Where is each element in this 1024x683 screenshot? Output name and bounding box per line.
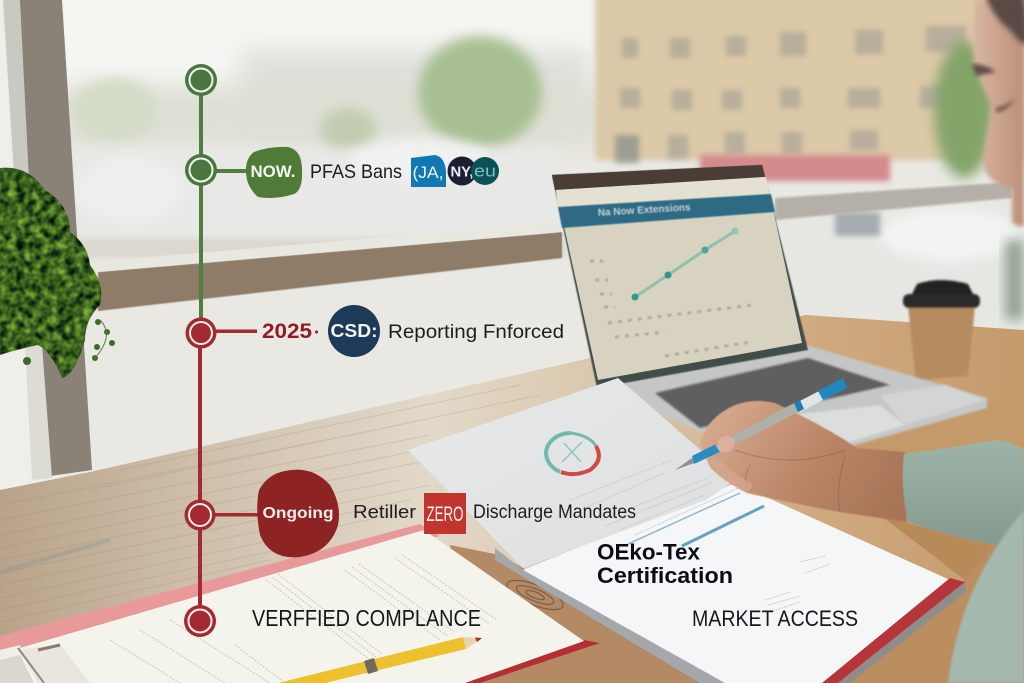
blue accent lines bbox=[628, 493, 740, 544]
railing bbox=[775, 182, 1012, 220]
badge: CSD: CSD: bbox=[330, 321, 378, 341]
lower fingers bbox=[715, 462, 747, 486]
connector: 2025 bbox=[201, 330, 257, 333]
node: start bbox=[185, 64, 217, 96]
badge: NOW: NOW. bbox=[250, 162, 296, 181]
left window frame bbox=[0, 0, 92, 490]
lower street bbox=[775, 205, 1024, 320]
paper stack bbox=[408, 378, 966, 683]
certificate white sheet bbox=[523, 483, 950, 683]
screen bbox=[556, 177, 802, 380]
node: verified compliance bbox=[184, 605, 216, 637]
notebook bottom left bbox=[0, 524, 600, 683]
label: Market Access: MARKET ACCESS bbox=[692, 606, 858, 631]
badge: CSD bbox=[328, 305, 380, 357]
plant bbox=[0, 168, 115, 378]
window sill bbox=[98, 232, 562, 311]
laptop bbox=[552, 165, 987, 447]
screen lid bbox=[552, 165, 808, 388]
timeline bbox=[184, 64, 260, 637]
icon: NY badge: NY, bbox=[450, 164, 474, 180]
badge: NOW bbox=[246, 147, 302, 198]
label: OEko-Tex Certification: OEko-Tex bbox=[597, 540, 701, 564]
fingertip bbox=[715, 433, 737, 455]
green timeline segment bbox=[199, 80, 203, 330]
line chart bbox=[590, 228, 752, 356]
icon: EU badge bbox=[471, 157, 499, 185]
badge: Ongoing bbox=[257, 470, 339, 557]
connector: ongoing bbox=[200, 513, 260, 516]
table right side grain bbox=[830, 525, 1024, 683]
keyboard bbox=[655, 358, 890, 428]
label: OEko-Tex Certification: Certification bbox=[597, 563, 733, 588]
icon: ZERO badge bbox=[424, 493, 466, 534]
building bbox=[595, 0, 1024, 160]
pencil bbox=[278, 637, 482, 683]
icon: NY badge bbox=[448, 156, 476, 186]
label: Reporting Enforced: Reporting Fnforced bbox=[388, 321, 564, 343]
table under papers bbox=[450, 545, 725, 683]
label: Discharge Mandates: Discharge Mandates bbox=[473, 502, 636, 523]
icon: USA badge bbox=[411, 155, 446, 187]
icon: EU badge: eu bbox=[474, 162, 496, 180]
awning bbox=[700, 155, 890, 181]
label: OEko-Tex Certification bbox=[597, 540, 733, 588]
arm and hand bbox=[700, 401, 907, 522]
screen header title: Na Now Extensions bbox=[598, 202, 691, 219]
dot separator bbox=[315, 330, 318, 334]
person: shoulder bbox=[948, 510, 1024, 683]
label: PFAS Bans: PFAS Bans bbox=[310, 161, 402, 183]
top grey sheet bbox=[408, 378, 735, 568]
node: now bbox=[185, 154, 217, 186]
red folder edge bbox=[822, 578, 965, 683]
person: face bbox=[972, 0, 1024, 226]
certificate logo bbox=[546, 433, 599, 474]
pen bbox=[675, 378, 847, 470]
badge: Ongoing: Ongoing bbox=[262, 505, 334, 522]
node: ongoing bbox=[184, 500, 216, 530]
wooden table bbox=[0, 315, 1024, 683]
red timeline segment bbox=[198, 333, 202, 621]
label: 2025: 2025 bbox=[262, 319, 312, 343]
screen header bbox=[558, 194, 775, 228]
label: Retailer: Retiller bbox=[353, 501, 416, 522]
connector: now bbox=[201, 169, 249, 173]
icon: USA badge: (JA, bbox=[412, 163, 444, 182]
sleeve bbox=[903, 440, 1024, 550]
hand holding pen bbox=[675, 378, 1024, 550]
coffee cup bbox=[903, 280, 980, 380]
label: Verified Compliance: VERFFIED COMPLANCE bbox=[252, 605, 481, 631]
node: 2025 bbox=[186, 318, 216, 348]
binder clips bbox=[0, 644, 90, 683]
laptop base bbox=[595, 345, 987, 447]
icon: ZERO badge: ZERO bbox=[426, 503, 464, 526]
